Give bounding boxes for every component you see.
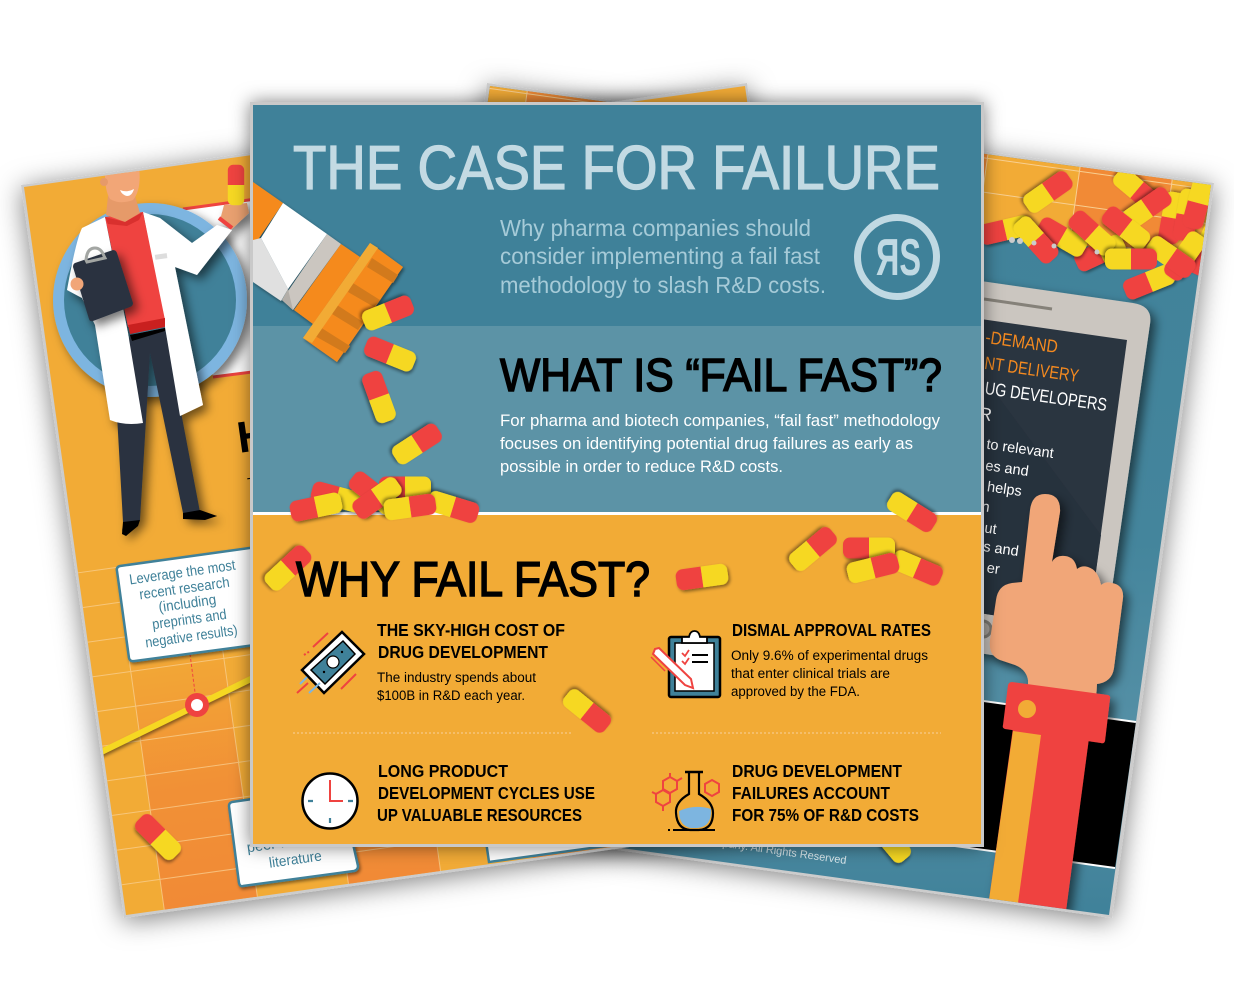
- pointing hand and sleeve: [989, 494, 1123, 911]
- top grid band: [476, 83, 1220, 263]
- icon: pill bottle: [253, 182, 403, 362]
- tablet heading: UG DEVELOPERS: [984, 378, 1108, 415]
- single pills: [262, 543, 729, 736]
- icon: clipboard and pen: [651, 631, 720, 697]
- pill below front sheet: [878, 847, 912, 867]
- tablet body text: to relevant: [985, 437, 1055, 462]
- callout: leverage research: [115, 546, 250, 666]
- block: failures: FAILURES ACCOUNT: [732, 783, 890, 803]
- icon: flying money: [297, 632, 364, 693]
- tablet heading: -DEMAND: [984, 327, 1059, 357]
- logo: [858, 218, 936, 296]
- block: approval: approved by the FDA.: [731, 684, 860, 699]
- icon: clock: [302, 774, 358, 828]
- circle behind doctor: [53, 203, 247, 397]
- hidden heading fragments: T: [246, 474, 258, 491]
- header band: [253, 105, 981, 326]
- pill held by doctor: [228, 165, 244, 205]
- what is band: [253, 326, 981, 512]
- logo: ЯS: [876, 229, 921, 287]
- falling pills: [360, 294, 445, 467]
- tablet body text: es and: [984, 458, 1030, 480]
- paragraph: fail fast definition: possible in order to reduce R&D costs.: [500, 458, 783, 476]
- callout: leverage research: negative results): [144, 623, 239, 651]
- block: failures: FOR 75% OF R&D COSTS: [732, 805, 919, 825]
- title: THE CASE FOR FAILURE: [293, 134, 940, 203]
- pill on left sheet: [132, 811, 184, 863]
- tablet: [960, 278, 1150, 672]
- copyright line: pany. All Rights Reserved: [722, 838, 847, 867]
- tablet heading: R: [978, 403, 993, 425]
- tablet heading: NT DELIVERY: [983, 353, 1080, 386]
- block: approval: Only 9.6% of experimental drugs: [731, 648, 928, 663]
- white panel with red rules: [182, 198, 250, 378]
- clipboard: [73, 250, 133, 321]
- callout: leverage research: preprints and: [151, 607, 228, 633]
- chart line with marker: [102, 654, 250, 759]
- callout: peer-reviewed literature: peer-reviewed: [246, 828, 339, 856]
- callout: peer-reviewed literature: literature: [268, 848, 323, 872]
- callout: leverage research: (including: [158, 592, 217, 616]
- block: cost: The industry spends about: [377, 670, 536, 685]
- block: approval: that enter clinical trials are: [731, 666, 890, 681]
- tablet heading: [984, 332, 1106, 421]
- block: failures: DRUG DEVELOPMENT: [732, 761, 902, 781]
- subtitle: methodology to slash R&D costs.: [500, 272, 826, 298]
- pill pile: [288, 469, 481, 525]
- subtitle: consider implementing a fail fast: [500, 243, 821, 269]
- heading: why fail fast: WHY FAIL FAST?: [296, 553, 650, 607]
- block: cycles: [377, 761, 595, 825]
- why band: [253, 512, 981, 844]
- callout: leverage research: recent research: [138, 575, 231, 603]
- tablet body text: s and: [982, 539, 1020, 560]
- callout: leverage research: Leverage the most: [128, 558, 237, 588]
- paragraph: fail fast definition: [500, 412, 941, 476]
- back sheet: left, doctor page: [21, 83, 857, 918]
- black band: [955, 700, 1136, 869]
- tablet body text: ut: [983, 520, 998, 538]
- front sheet: [250, 102, 984, 847]
- paragraph: fail fast definition: For pharma and biotech companies, “fail fast” methodology: [500, 412, 941, 430]
- tablet body text: n: [980, 499, 991, 516]
- block: cost: [377, 620, 565, 703]
- hidden heading fragments: H: [234, 410, 272, 463]
- icon: flask and molecules: [652, 772, 719, 830]
- callout: third, mostly hidden: [486, 847, 608, 864]
- block: cycles: DEVELOPMENT CYCLES USE: [378, 783, 595, 803]
- block: cost: DRUG DEVELOPMENT: [378, 642, 548, 662]
- block: failures: [732, 761, 919, 825]
- block: cycles: LONG PRODUCT: [378, 761, 508, 781]
- hidden heading fragments: [238, 422, 250, 480]
- tablet body text: er: [986, 560, 1001, 578]
- block: approval: DISMAL APPROVAL RATES: [732, 620, 931, 640]
- back sheet: right, tablet and hand page: [385, 83, 1226, 918]
- callout: peer-reviewed literature: [229, 786, 358, 886]
- block: cost: THE SKY-HIGH COST OF: [377, 620, 565, 640]
- chart grid: [78, 567, 611, 910]
- tablet body text: [984, 440, 1054, 574]
- heading: what is fail fast: WHAT IS “FAIL FAST”?: [500, 349, 942, 401]
- block: cycles: UP VALUABLE RESOURCES: [377, 805, 582, 825]
- block: cost: $100B in R&D each year.: [377, 688, 525, 703]
- scattered pills, top right: [984, 168, 1211, 302]
- subtitle: Why pharma companies should: [500, 215, 811, 241]
- subtitle: [500, 215, 826, 298]
- tablet body text: helps: [986, 479, 1023, 500]
- block: approval: [731, 620, 931, 699]
- pills right cluster: [786, 489, 945, 588]
- paragraph: fail fast definition: focuses on identifying potential drug failures as early as: [500, 435, 913, 453]
- doctor figure: [67, 160, 249, 536]
